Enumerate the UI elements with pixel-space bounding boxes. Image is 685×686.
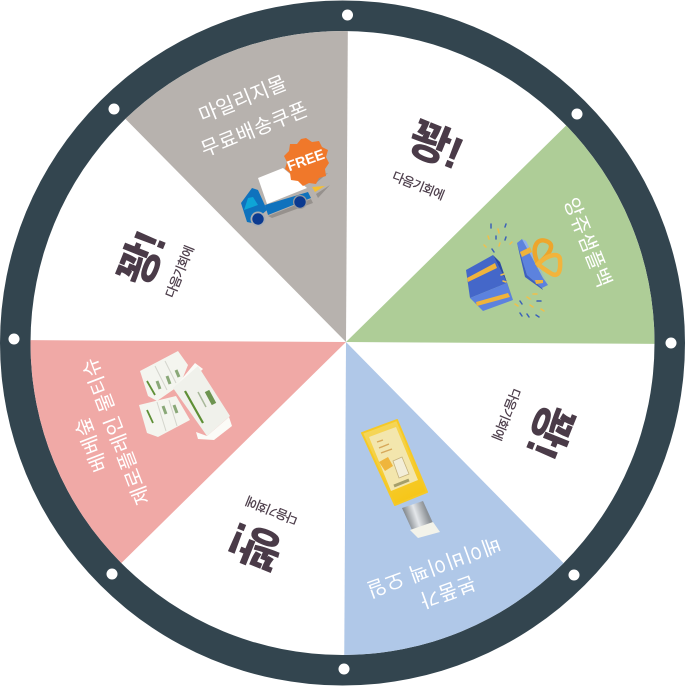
badge: FREE	[285, 147, 327, 175]
label: mileage mall free shipping coupon: 마일리지몰	[196, 72, 290, 128]
text: lose left: 꽝!	[110, 225, 176, 293]
panel: gray wedge mileage coupon	[126, 31, 348, 342]
text: lose bottom	[222, 493, 300, 578]
text: lose top right	[390, 113, 469, 203]
icon: delivery truck with free badge	[241, 138, 330, 226]
text: lose right: 다음기회에	[489, 386, 523, 442]
panel: green wedge sample bag	[346, 126, 654, 344]
label: mileage mall free shipping coupon	[196, 72, 312, 162]
large pack	[173, 363, 232, 440]
bottom row packs	[139, 396, 190, 437]
text: lose top right: 다음기회에	[390, 169, 446, 203]
panel: blue wedge oil product	[344, 342, 564, 655]
icon: wet wipes packs	[139, 351, 232, 440]
icon: open gift box	[466, 224, 560, 317]
label: product name: 베이비이펙 오일	[363, 532, 503, 601]
text: lose right	[489, 386, 582, 465]
confetti	[484, 224, 544, 317]
label: sample bag: 앙쥬샘플백	[559, 194, 616, 291]
label: mileage mall free shipping coupon: 무료배송쿠폰	[198, 98, 312, 162]
icon: yellow oil bottle	[362, 420, 440, 538]
panel: pink wedge wet wipes	[30, 340, 346, 563]
label: product name: 본품가	[416, 571, 478, 612]
text: lose bottom: 꽝!	[222, 512, 290, 578]
label: bebesup zero plain wet wipes: 제로플레인 물티슈	[78, 354, 155, 508]
label: bebesup zero plain wet wipes: 베베숲	[71, 413, 112, 475]
text: lose left	[110, 225, 197, 300]
text: lose right: 꽝!	[516, 397, 582, 465]
text: lose top right: 꽝!	[401, 113, 469, 179]
text: lose bottom: 다음기회에	[244, 493, 300, 527]
text: lose left: 다음기회에	[163, 244, 197, 300]
top row packs	[140, 351, 188, 401]
